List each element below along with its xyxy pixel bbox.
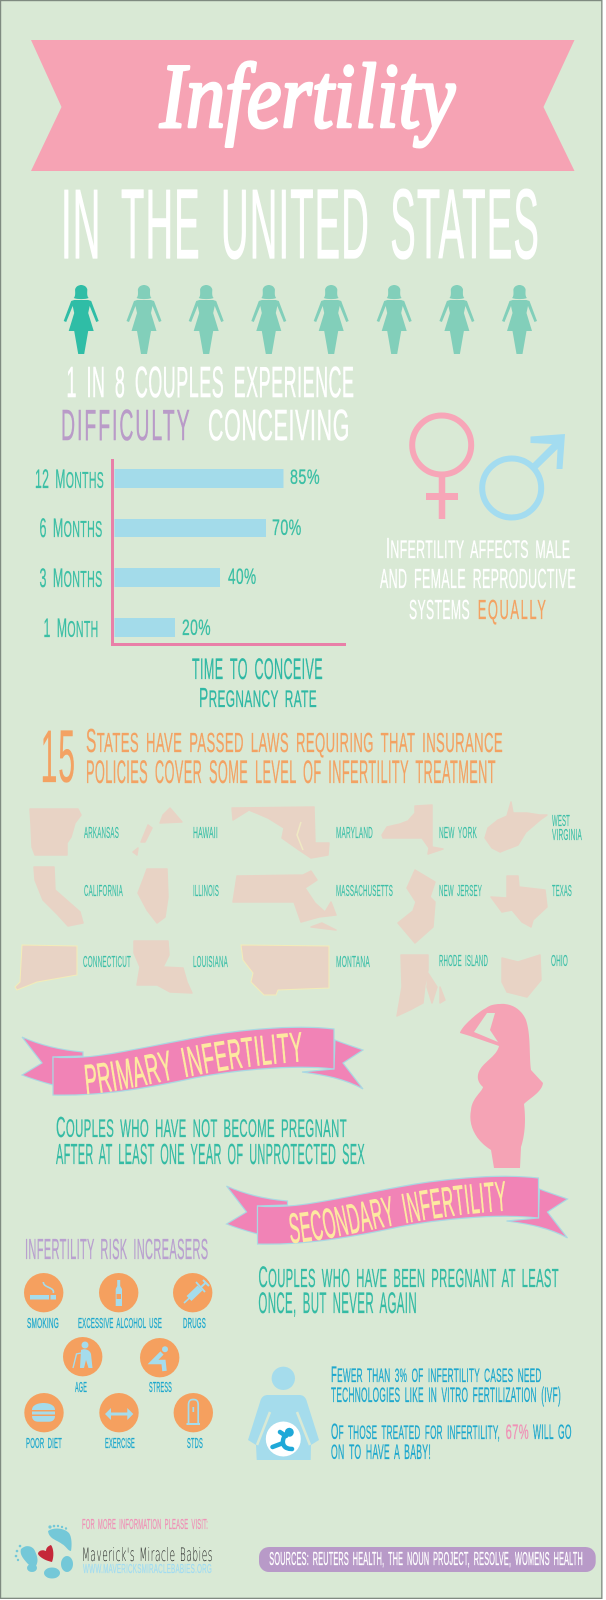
panel: risk icons: POOR DIET bbox=[26, 1435, 62, 1452]
bar: 1 month: 20% bbox=[182, 615, 211, 640]
text: Maverick's Miracle Babies bbox=[82, 1544, 213, 1566]
definition: secondary infertility bbox=[258, 1261, 559, 1320]
icon: woman 8 bbox=[502, 285, 537, 354]
chart axis subtitle: PREGNANCY RATE bbox=[199, 682, 317, 713]
bar: 12 months bbox=[35, 464, 320, 494]
icon: highlighted woman bbox=[64, 285, 99, 354]
panel: state maps: ILLINOIS bbox=[193, 883, 219, 900]
panel: risk icons: SMOKING bbox=[27, 1315, 59, 1332]
risk: exercise bbox=[99, 1393, 139, 1452]
text block: affects male and female bbox=[380, 533, 576, 625]
text: TIME TO CONCEIVE bbox=[192, 653, 323, 686]
text block: IVF facts: 67% bbox=[506, 1421, 529, 1444]
icon: female symbol bbox=[412, 416, 471, 519]
panel: state maps: ARKANSAS bbox=[84, 825, 119, 842]
panel: state maps: TEXAS bbox=[552, 883, 572, 900]
bar: 6 months bbox=[40, 513, 302, 543]
bar: 6 months: 70% bbox=[272, 515, 302, 540]
ribbon: primary infertility: PRIMARY INFERTILITY bbox=[84, 1032, 302, 1094]
icon: woman 6 bbox=[377, 285, 412, 354]
state: Connecticut bbox=[15, 945, 131, 990]
ribbon: primary infertility bbox=[20, 1026, 364, 1096]
state: Hawaii bbox=[133, 808, 218, 855]
panel: risk icons bbox=[24, 1273, 213, 1452]
panel: risk icons: STRESS bbox=[149, 1379, 172, 1396]
risk: stress bbox=[140, 1338, 179, 1396]
text: FOR MORE INFORMATION PLEASE VISIT: bbox=[82, 1516, 208, 1533]
panel: state maps: HAWAII bbox=[193, 825, 218, 842]
state: Arkansas bbox=[30, 809, 119, 855]
state: Illinois bbox=[138, 869, 219, 923]
panel: risk icons: EXCESSIVE ALCOHOL USE bbox=[78, 1315, 162, 1332]
risk: STDs bbox=[174, 1393, 213, 1452]
panel: state maps: CALIFORNIA bbox=[84, 883, 123, 900]
icon: male symbol bbox=[482, 434, 565, 518]
text: WWW.MAVERICKSMIRACLEBABIES.ORG bbox=[83, 1561, 212, 1576]
risk: STDs: STDS bbox=[187, 1435, 203, 1452]
title: Infertility: Infertility bbox=[159, 45, 455, 147]
bar: 1 month bbox=[44, 613, 211, 643]
text: CONCEIVING bbox=[208, 401, 350, 450]
panel: risk icons: EXERCISE bbox=[105, 1435, 135, 1452]
stat: 15 states: 15 bbox=[41, 715, 76, 798]
panel: state maps: CONNECTICUT bbox=[83, 954, 131, 971]
panel: state maps: LOUISIANA bbox=[193, 954, 228, 971]
title banner bbox=[31, 40, 574, 171]
risk: smoking bbox=[24, 1273, 63, 1332]
bar: 1 month: 1 MONTH bbox=[44, 613, 98, 643]
icon: woman 5 bbox=[314, 285, 349, 354]
bar: 12 months: 12 MONTHS bbox=[35, 464, 104, 494]
panel: state maps: MASSACHUSETTS bbox=[336, 883, 393, 900]
icon: woman 4 bbox=[251, 285, 286, 354]
state: California bbox=[34, 867, 123, 926]
state: New York bbox=[382, 805, 477, 854]
ribbon: secondary infertility bbox=[225, 1176, 568, 1245]
bar: 3 months bbox=[40, 563, 256, 593]
bar: 3 months: 3 MONTHS bbox=[40, 563, 102, 593]
state: New Jersey bbox=[398, 870, 482, 943]
icon: woman 3 bbox=[189, 285, 224, 354]
panel: state maps: MARYLAND bbox=[336, 825, 373, 842]
panel: state maps: OHIO bbox=[551, 953, 568, 970]
icon row: 1 in 8 women bbox=[64, 285, 537, 354]
bar: 6 months: 6 MONTHS bbox=[40, 513, 102, 543]
icon: woman 7 bbox=[439, 285, 474, 354]
text block: IVF facts: ON TO HAVE A BABY! bbox=[331, 1441, 431, 1464]
illustration: pregnant woman silhouette bbox=[460, 1004, 543, 1168]
definition: primary infertility bbox=[56, 1112, 365, 1171]
bar: 12 months: 85% bbox=[290, 466, 320, 489]
state: Texas bbox=[491, 876, 572, 927]
text block: affects male and female: SYSTEMS bbox=[409, 594, 470, 625]
panel: state maps: MONTANA bbox=[336, 954, 370, 971]
risk: poor diet bbox=[24, 1393, 64, 1452]
stat: 15 states bbox=[41, 715, 503, 798]
heading: difficulty conceiving: DIFFICULTY bbox=[61, 401, 192, 450]
icon: mother with baby bbox=[248, 1367, 319, 1460]
risk: excessive alcohol use bbox=[78, 1273, 162, 1332]
state: Louisiana bbox=[134, 941, 228, 993]
text block: IVF facts bbox=[331, 1362, 572, 1464]
state: Massachusetts bbox=[233, 871, 393, 930]
state: West Virginia bbox=[485, 802, 582, 852]
risk: drugs bbox=[173, 1273, 212, 1332]
ribbon: secondary infertility: SECONDARY INFERTILITY bbox=[289, 1181, 505, 1244]
state: West Virginia: WEST bbox=[552, 813, 570, 830]
panel: state maps: NEW JERSEY bbox=[439, 883, 482, 900]
risk: age: AGE bbox=[75, 1379, 87, 1396]
bar: 3 months: 40% bbox=[228, 564, 256, 589]
risk: drugs: DRUGS bbox=[183, 1315, 206, 1332]
risk: age bbox=[63, 1337, 102, 1396]
panel: state maps: RHODE ISLAND bbox=[439, 953, 488, 970]
state: Maryland bbox=[232, 807, 373, 858]
panel: state maps bbox=[15, 802, 582, 1016]
icon: woman 2 bbox=[126, 285, 162, 354]
panel: state maps: NEW YORK bbox=[439, 825, 477, 842]
text: INFERTILITY RISK INCREASERS bbox=[25, 1234, 208, 1266]
bar chart: time to conceive bbox=[35, 459, 346, 713]
logo: footprints and heart bbox=[15, 1525, 73, 1578]
state: Ohio bbox=[502, 953, 568, 997]
state: Montana bbox=[241, 945, 370, 995]
state: Rhode Island bbox=[397, 953, 488, 1016]
